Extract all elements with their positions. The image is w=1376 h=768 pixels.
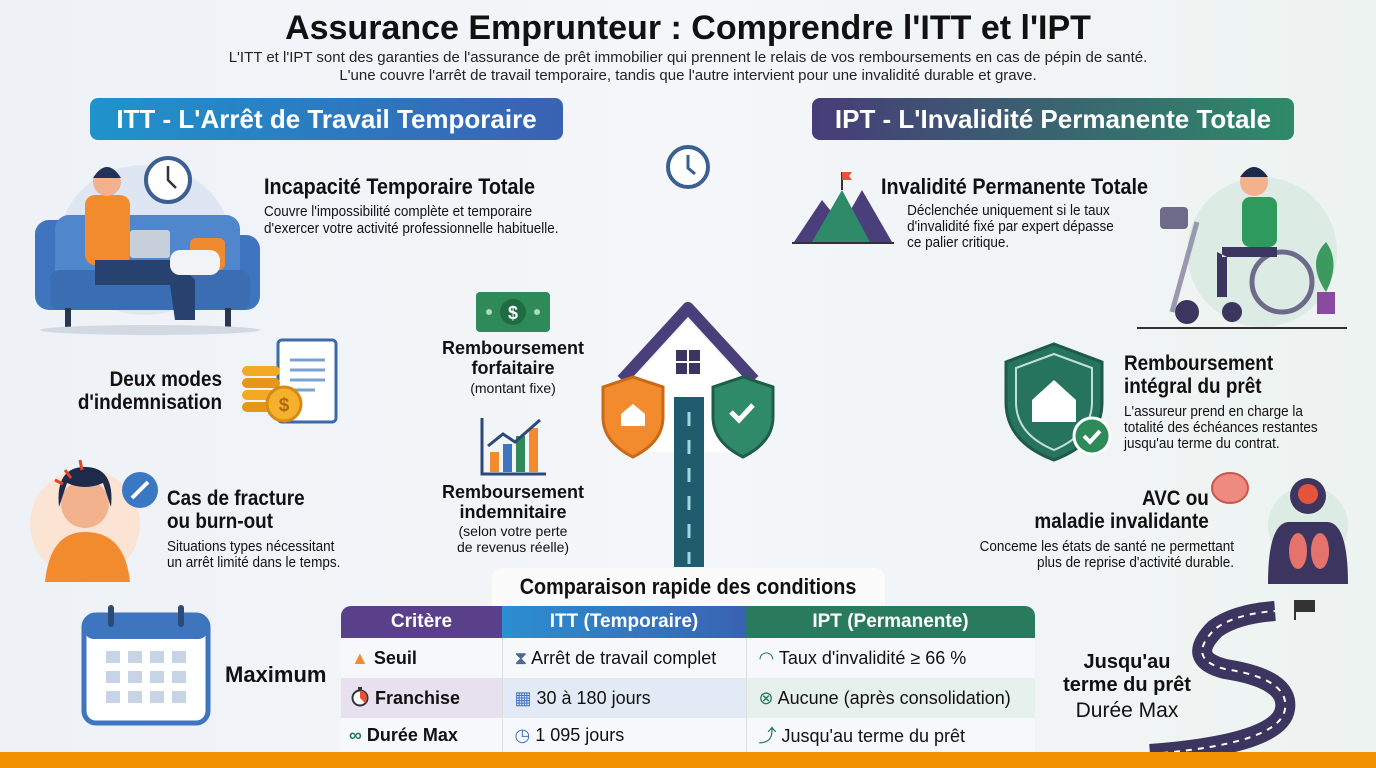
text: Jusqu'au terme du prêt	[1063, 651, 1191, 722]
icon: shield with house	[1004, 342, 1112, 462]
icon: bar chart	[480, 418, 546, 476]
heading: ITT pill: ITT - L'Arrêt de Travail Temporaire	[116, 104, 537, 134]
icon: banknote: $	[508, 303, 518, 323]
text: Jusqu'au terme du prêt: Durée Max	[1076, 699, 1178, 722]
text: AVC ou maladie invalidante	[980, 487, 1234, 571]
icon: coins and document	[242, 338, 338, 424]
title: Assurance Emprunteur : Comprendre l'ITT et l'IPT	[285, 9, 1091, 47]
text: Remboursement intégral du prêt: L'assureur prend en charge la	[1124, 403, 1303, 420]
text: Remboursement forfaitaire: (montant fixe)	[470, 380, 556, 396]
illustration: man on sofa	[35, 156, 260, 335]
text: AVC ou maladie invalidante: Conceme les états de santé ne permettant	[980, 538, 1234, 555]
text: Remboursement indemnitaire	[442, 482, 584, 555]
table: ITT (Temporaire)	[550, 611, 698, 632]
text: Remboursement intégral du prêt: intégral du prêt	[1124, 375, 1262, 398]
footer bar	[0, 752, 1376, 768]
icon: clock	[666, 145, 710, 189]
text: Jusqu'au terme du prêt: terme du prêt	[1063, 674, 1191, 696]
illustration: man in wheelchair	[1137, 167, 1347, 329]
text: Incapacité Temporaire Totale: d'exercer votre activité professionnelle habituelle.	[264, 220, 558, 237]
text: Jusqu'au terme du prêt: Jusqu'au	[1084, 651, 1170, 673]
table: ▲ Seuil	[351, 648, 417, 668]
text: Invalidité Permanente Totale: Invalidité Permanente Totale	[881, 174, 1148, 199]
text: Remboursement forfaitaire: forfaitaire	[471, 358, 555, 378]
subtitle: L'une couvre l'arrêt de travail temporaire, tandis que l'autre intervient pour une invalidité durable et grave.	[339, 67, 1037, 84]
text: Cas de fracture ou burn-out: Situations types nécessitant	[167, 538, 334, 555]
table: ⧗ Arrêt de travail complet	[514, 648, 716, 668]
panel: comparison table	[341, 568, 1035, 752]
illustration: body with brain	[1211, 472, 1348, 584]
text: Cas de fracture ou burn-out	[167, 487, 340, 571]
text: Invalidité Permanente Totale	[881, 174, 1148, 251]
text: Remboursement indemnitaire: de revenus réelle)	[457, 539, 569, 555]
heading: table title	[492, 568, 885, 608]
table: ⊗ Aucune (après consolidation)	[758, 688, 1011, 708]
table: IPT (Permanente)	[812, 611, 969, 632]
icon: calendar	[82, 605, 210, 726]
illustration: woman with headache	[30, 460, 158, 582]
icon: coins and document: $	[279, 395, 290, 416]
text: Cas de fracture ou burn-out: un arrêt limité dans le temps.	[167, 554, 340, 571]
text: Remboursement intégral du prêt: Remboursement	[1124, 352, 1273, 375]
text: Remboursement forfaitaire	[442, 338, 584, 396]
text: AVC ou maladie invalidante: plus de reprise d'activité durable.	[1037, 554, 1234, 571]
table	[341, 606, 1035, 752]
text: Deux modes d'indemnisation: d'indemnisation	[78, 391, 222, 414]
table: ∞ Durée Max	[349, 724, 458, 744]
text: Remboursement indemnitaire: (selon votre perte	[459, 523, 567, 539]
text: AVC ou maladie invalidante: maladie invalidante	[1034, 510, 1209, 533]
illustration: winding road with flag	[1149, 600, 1315, 752]
illustration: house with shields and road	[602, 302, 774, 567]
text: Remboursement intégral du prêt	[1124, 352, 1318, 452]
table: ◷ 1 095 jours	[514, 724, 624, 744]
text: Remboursement forfaitaire: Remboursement	[442, 338, 584, 358]
text: Maximum: Maximum	[225, 662, 326, 687]
table: ◠ Taux d'invalidité ≥ 66 %	[758, 648, 966, 668]
text: Invalidité Permanente Totale: ce palier critique.	[907, 234, 1009, 251]
table: ▦ 30 à 180 jours	[514, 688, 651, 708]
text: Cas de fracture ou burn-out: ou burn-out	[167, 510, 273, 533]
heading: table title: Comparaison rapide des conditions	[520, 574, 857, 599]
text: Incapacité Temporaire Totale	[264, 174, 558, 237]
table: ⤴ Jusqu'au terme du prêt	[758, 726, 965, 746]
heading: ITT pill	[90, 98, 563, 140]
text: Invalidité Permanente Totale: Déclenchée uniquement si le taux	[907, 202, 1110, 219]
text: Remboursement indemnitaire: Remboursement	[442, 482, 584, 502]
text: Remboursement indemnitaire: indemnitaire	[459, 502, 567, 522]
text: Invalidité Permanente Totale: d'invalidité fixé par expert dépasse	[907, 218, 1114, 235]
text: Remboursement intégral du prêt: jusqu'au terme du contrat.	[1124, 435, 1280, 452]
table: Franchise	[375, 688, 460, 708]
text: Deux modes d'indemnisation	[78, 368, 222, 414]
subtitle	[229, 49, 1147, 84]
text: Incapacité Temporaire Totale: Couvre l'impossibilité complète et temporaire	[264, 203, 532, 220]
heading: IPT pill: IPT - L'Invalidité Permanente Totale	[835, 104, 1271, 134]
text: Cas de fracture ou burn-out: Cas de fracture	[167, 487, 305, 510]
table: Critère	[391, 611, 452, 632]
heading: IPT pill	[812, 98, 1294, 140]
subtitle: L'ITT et l'IPT sont des garanties de l'assurance de prêt immobilier qui prennent le relais de vos remboursements en cas de pépin de santé.	[229, 49, 1147, 66]
text: Deux modes d'indemnisation: Deux modes	[110, 368, 222, 391]
text: Remboursement intégral du prêt: totalité des échéances restantes	[1124, 419, 1318, 436]
icon: banknote	[476, 292, 550, 332]
icon: mountain with flag	[792, 172, 894, 244]
text: AVC ou maladie invalidante: AVC ou	[1142, 487, 1209, 510]
text: Incapacité Temporaire Totale: Incapacité Temporaire Totale	[264, 174, 535, 199]
